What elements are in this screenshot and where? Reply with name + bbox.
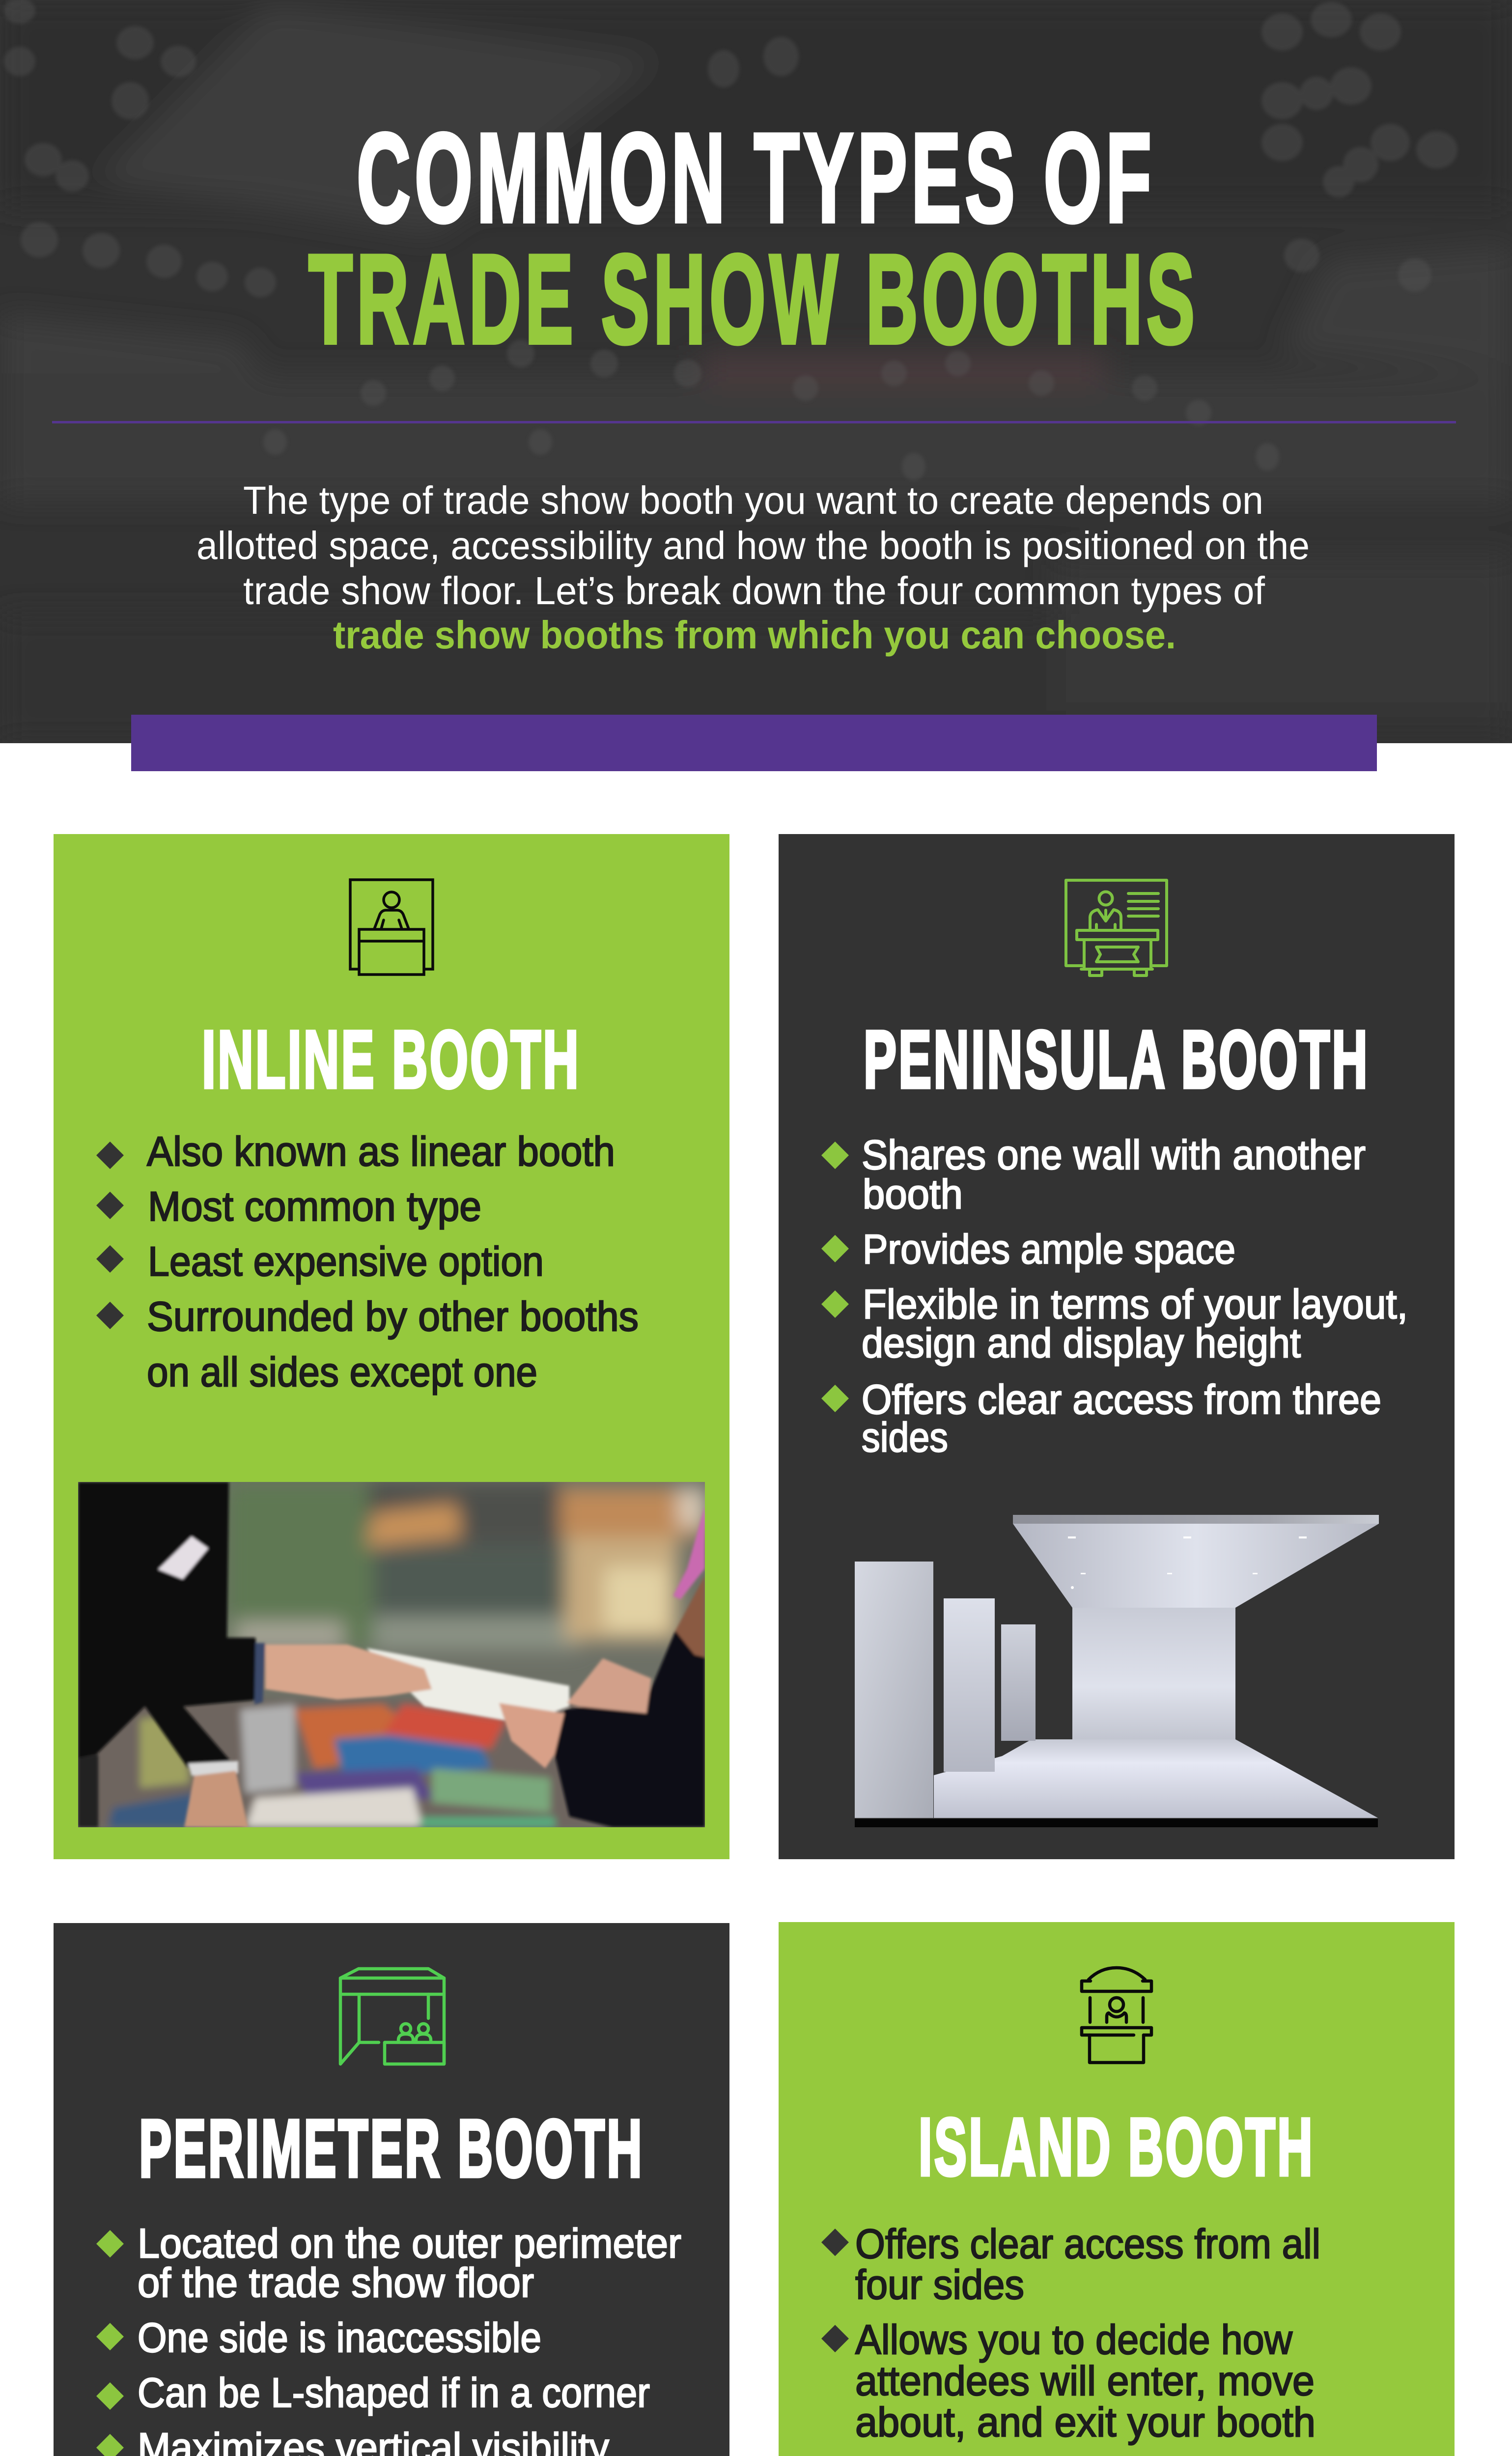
icon: inline booth <box>350 880 433 975</box>
render: empty peninsula booth <box>855 1515 1379 1827</box>
icon: perimeter booth <box>340 1969 444 2064</box>
intro paragraph: allotted space, accessibility and how the booth is positioned on the <box>196 524 1310 567</box>
panel: perimeter booth <box>54 1923 729 2456</box>
purple banner <box>131 715 1377 771</box>
bullet list: Most common type <box>148 1183 481 1229</box>
bullet list: Offers clear access from all <box>855 2221 1320 2267</box>
man in black <box>78 1482 260 1768</box>
icon: island booth <box>1082 1968 1151 2063</box>
intro paragraph: trade show floor. Let’s break down the four common types of <box>243 569 1265 613</box>
paper and hand <box>366 1648 569 1724</box>
bullet list: Provides ample space <box>863 1226 1235 1272</box>
bullet list <box>96 2220 681 2456</box>
bullet list: Can be L-shaped if in a corner <box>138 2370 650 2416</box>
bullet list <box>96 1128 639 1395</box>
bullet list: Also known as linear booth <box>147 1128 615 1174</box>
panel: island booth <box>779 1922 1455 2456</box>
blurred trade show floor background <box>5 0 1507 490</box>
bullet list: four sides <box>855 2261 1024 2308</box>
bullet list: sides <box>862 1414 948 1460</box>
panel: inline booth <box>54 834 729 1859</box>
bullet list: attendees will enter, move <box>855 2358 1315 2404</box>
bullet list <box>821 1132 1408 1460</box>
bullet list: Shares one wall with another <box>862 1132 1366 1178</box>
intro paragraph: The type of trade show booth you want to create depends on <box>243 478 1263 522</box>
intro paragraph <box>196 478 1310 657</box>
bullet list: Least expensive option <box>148 1238 544 1284</box>
bullet list: Located on the outer perimeter <box>138 2220 681 2266</box>
bullet list: booth <box>863 1171 963 1217</box>
title <box>308 107 1199 370</box>
bullet list: One side is inaccessible <box>138 2315 541 2361</box>
table of magazines <box>99 1699 594 1827</box>
bullet list: about, and exit your booth <box>855 2399 1316 2445</box>
heading: PERIMETER BOOTH <box>139 2103 644 2194</box>
photo: handing over paper at a stand <box>78 1482 705 1827</box>
bullet list: on all sides except one <box>147 1349 537 1395</box>
bullet list: Flexible in terms of your layout, <box>863 1281 1408 1327</box>
bullet list: design and display height <box>862 1320 1301 1366</box>
bullet list: Surrounded by other booths <box>147 1293 639 1340</box>
bullet list: Allows you to decide how <box>855 2316 1292 2363</box>
bullet list: of the trade show floor <box>138 2260 534 2306</box>
bullet list <box>821 2221 1359 2456</box>
hero header panel <box>0 0 1512 743</box>
heading: INLINE BOOTH <box>202 1014 581 1105</box>
woman on right <box>555 1603 705 1827</box>
intro paragraph: trade show booths from which you can choose. <box>333 613 1176 657</box>
icon: peninsula booth <box>1066 880 1167 976</box>
bullet list: Offers clear access from three <box>862 1376 1381 1423</box>
panel: peninsula booth <box>779 834 1455 1859</box>
